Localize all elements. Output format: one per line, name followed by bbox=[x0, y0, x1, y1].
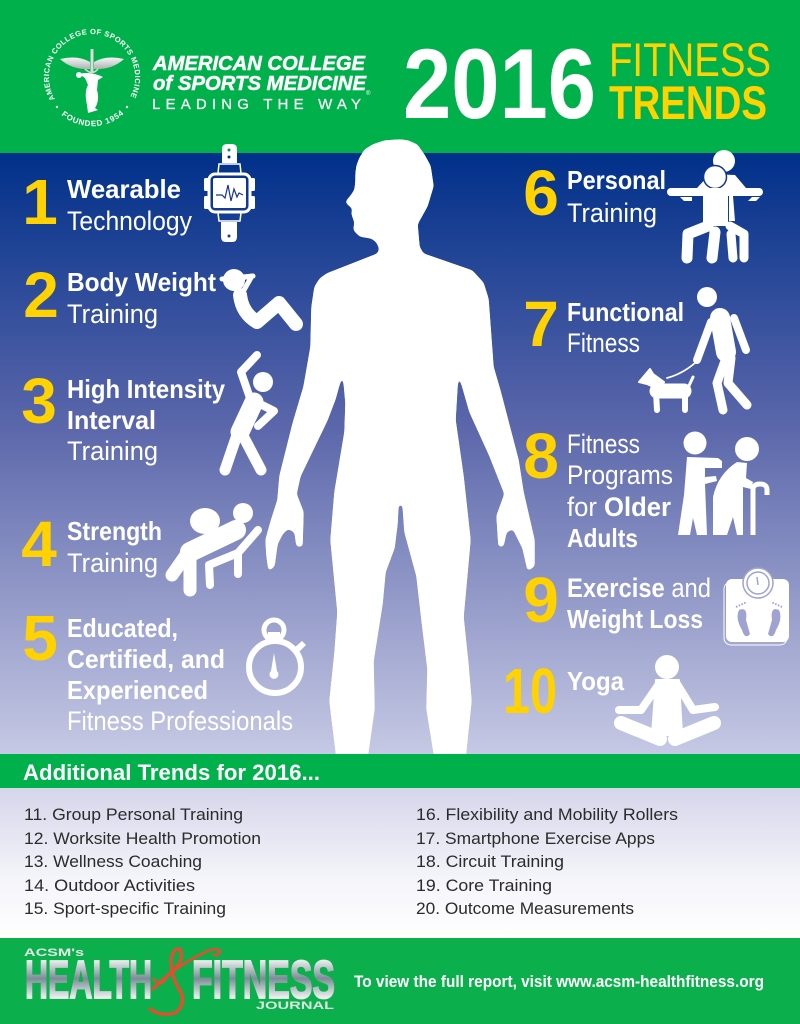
list: trends 11 to 15: 15. Sport-specific Training bbox=[24, 899, 226, 918]
title: 2016: 2016 bbox=[403, 28, 596, 139]
title: Trends: TRENDS bbox=[609, 76, 767, 129]
panel: trend 1: Technology bbox=[67, 206, 192, 236]
panel: trend 3: High Intensity bbox=[67, 374, 225, 404]
list: trends 16 to 20: 16. Flexibility and Mobility Rollers bbox=[416, 805, 678, 824]
text: ACSM name: AMERICAN COLLEGE bbox=[152, 53, 366, 75]
panel: trend 9: Exercise and bbox=[567, 573, 711, 603]
panel: trend 4: Training bbox=[67, 548, 158, 578]
list: trends 11 to 15 bbox=[24, 805, 261, 918]
panel: trend 7: 7 bbox=[523, 288, 559, 360]
panel: trend 10: 10 bbox=[503, 655, 557, 727]
panel: trend 2: Training bbox=[67, 299, 158, 329]
icon: ACSM seal: AMERICAN COLLEGE OF SPORTS MEDICINE bbox=[44, 28, 140, 100]
panel: trend 8: Fitness bbox=[567, 429, 640, 459]
icon: yoga figure bbox=[619, 655, 715, 739]
panel: trend 7: Functional bbox=[567, 297, 684, 327]
panel: trend 5: Certified, and bbox=[67, 644, 225, 674]
panel: additional trends list bbox=[0, 788, 800, 938]
panel: trend 7 bbox=[523, 287, 747, 410]
panel: trend 6: Personal bbox=[567, 165, 666, 195]
panel: trend 8: 8 bbox=[523, 420, 559, 492]
panel: trend 5 bbox=[22, 602, 306, 736]
panel: trend 3: 3 bbox=[21, 365, 57, 437]
list: trends 16 to 20 bbox=[416, 805, 678, 918]
panel: trend 2 bbox=[23, 259, 296, 331]
list: trends 11 to 15: 11. Group Personal Training bbox=[24, 805, 243, 824]
panel: trend 4 bbox=[21, 503, 258, 590]
panel: trend 10 bbox=[503, 655, 715, 739]
icon: smartwatch bbox=[204, 144, 255, 242]
panel: header band bbox=[0, 0, 800, 153]
panel: trend 3: Interval bbox=[67, 405, 156, 435]
panel: trend 8: Adults bbox=[567, 523, 638, 553]
panel: trend 8: Programs bbox=[567, 460, 673, 490]
panel: trend 10: Yoga bbox=[567, 666, 624, 696]
list: trends 11 to 15: 12. Worksite Health Promotion bbox=[24, 829, 261, 848]
panel: trend 9: Weight Loss bbox=[567, 604, 703, 634]
panel: additional trends heading band bbox=[0, 754, 800, 788]
icon: bathroom scale bbox=[724, 568, 789, 645]
logo: Health and Fitness Journal: FITNESS bbox=[192, 950, 335, 1010]
panel: trend 9: 9 bbox=[523, 564, 559, 636]
list: trends 11 to 15: 14. Outdoor Activities bbox=[24, 876, 195, 895]
panel: trend 6: Training bbox=[567, 198, 657, 228]
logo: Health and Fitness Journal: JOURNAL bbox=[256, 1000, 334, 1012]
logo: Health and Fitness Journal bbox=[24, 947, 335, 1014]
panel: trend 4: 4 bbox=[21, 508, 57, 580]
icon: bench press figure bbox=[172, 503, 258, 590]
logo: Health and Fitness Journal: ACSM's bbox=[24, 947, 84, 959]
panel: trend 1: 1 bbox=[22, 166, 58, 238]
text: ACSM name: of SPORTS MEDICINE bbox=[153, 73, 367, 95]
panel: trend 3 bbox=[21, 355, 274, 470]
list: trends 16 to 20: 19. Core Training bbox=[416, 876, 552, 895]
panel: footer bbox=[0, 938, 800, 1024]
panel: trend 1 bbox=[22, 144, 255, 242]
icon: ACSM seal: FOUNDED 1954 bbox=[62, 110, 124, 126]
text: ACSM name bbox=[152, 53, 371, 113]
text: ACSM name: ® bbox=[366, 90, 371, 97]
logo: Health and Fitness Journal: HEALTH bbox=[25, 950, 152, 1010]
text: ACSM name: LEADING THE WAY bbox=[152, 96, 361, 113]
list: trends 16 to 20: 17. Smartphone Exercise Apps bbox=[416, 829, 655, 848]
icon: stopwatch bbox=[249, 620, 306, 693]
icon: sit-up figure bbox=[222, 269, 296, 324]
panel: trend 9 bbox=[523, 564, 789, 645]
panel: trend 5: Educated, bbox=[67, 613, 178, 643]
panel: trend 2: 2 bbox=[23, 259, 59, 331]
panel: trend 7: Fitness bbox=[567, 328, 640, 358]
panel: trend 5: 5 bbox=[22, 602, 58, 674]
icon: person walking a dog bbox=[639, 287, 747, 410]
panel: trend 6: 6 bbox=[523, 157, 559, 229]
panel: trend 8: for Older bbox=[567, 492, 671, 522]
icon: stretching figure bbox=[225, 355, 274, 470]
heading: additional trends: Additional Trends for 2016... bbox=[23, 760, 320, 785]
panel: trend 8 bbox=[523, 420, 767, 553]
list: trends 16 to 20: 20. Outcome Measurements bbox=[416, 899, 634, 918]
icon: personal trainer with client bbox=[667, 150, 763, 258]
panel: trend 5: Experienced bbox=[67, 675, 208, 705]
icon: trainer helping older adult bbox=[678, 432, 767, 535]
list: trends 11 to 15: 13. Wellness Coaching bbox=[24, 852, 202, 871]
panel: blue gradient background bbox=[0, 153, 800, 754]
panel: trend 6 bbox=[523, 150, 763, 258]
icon: human silhouette bbox=[266, 140, 534, 758]
panel: trend 1: Wearable bbox=[67, 174, 181, 204]
panel: trend 5: Fitness Professionals bbox=[67, 706, 293, 736]
list: trends 16 to 20: 18. Circuit Training bbox=[416, 852, 564, 871]
panel: trend 4: Strength bbox=[67, 516, 162, 546]
panel: trend 3: Training bbox=[67, 436, 158, 466]
text: report link: To view the full report, visit www.acsm-healthfitness.org bbox=[354, 972, 764, 991]
panel: trend 2: Body Weight bbox=[67, 267, 216, 297]
